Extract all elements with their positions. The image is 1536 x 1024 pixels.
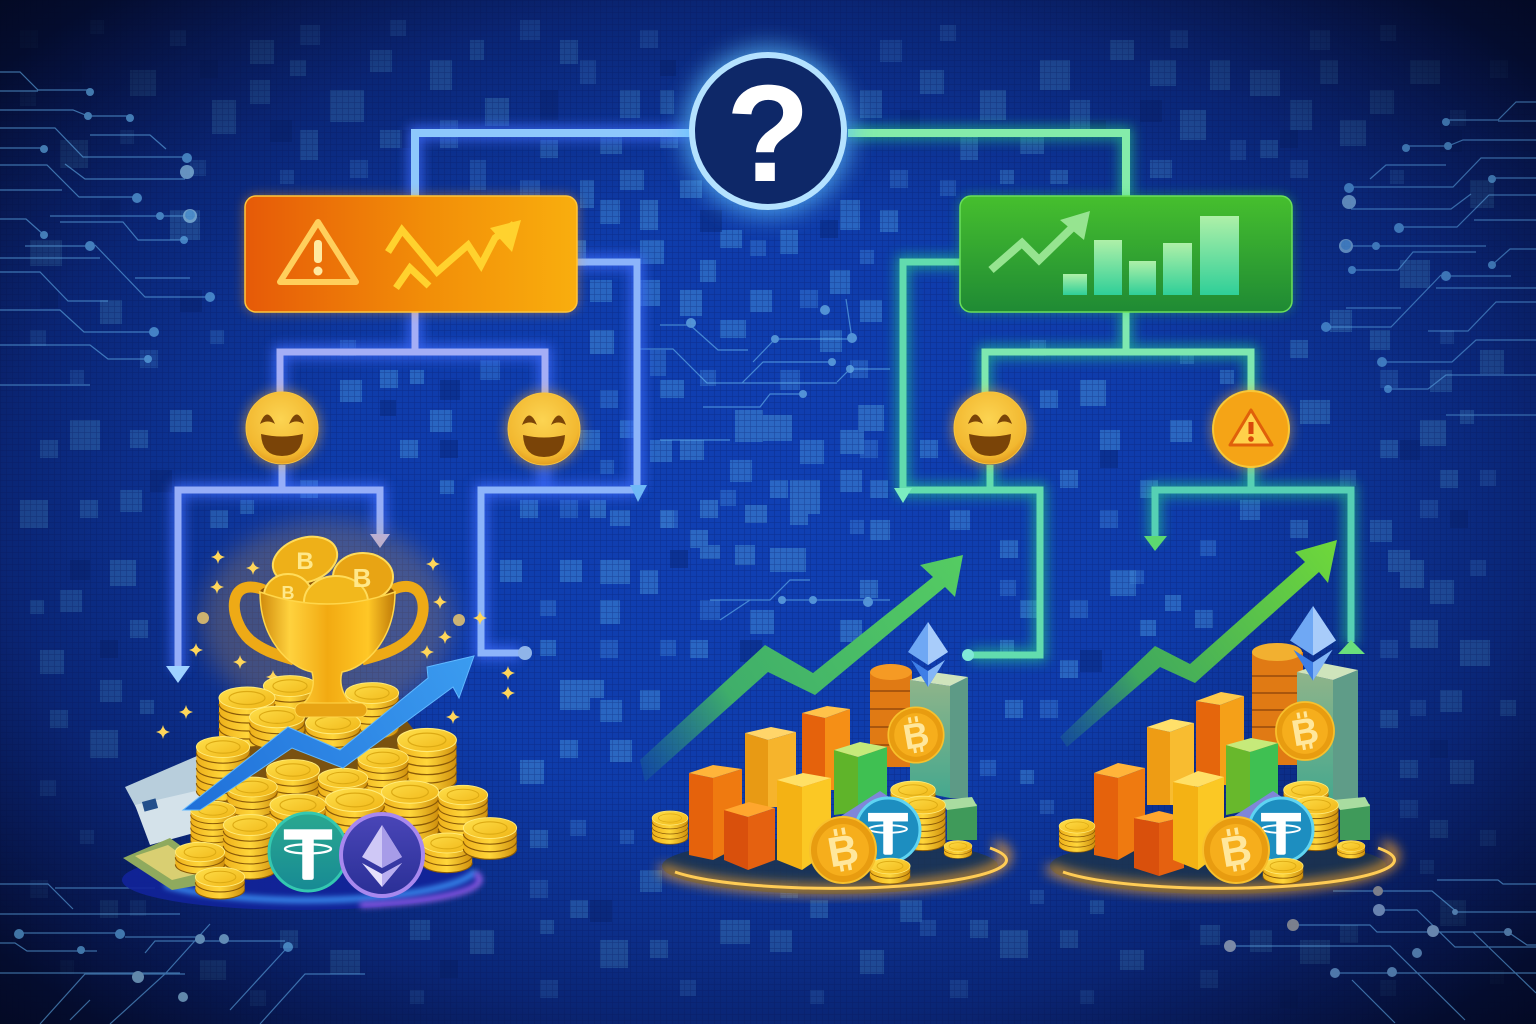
connector: green box to outcomes bbox=[985, 311, 1251, 395]
icon: warning coin bbox=[1211, 389, 1291, 469]
icon: warning triangle bbox=[280, 222, 356, 282]
coin pile backing bbox=[215, 695, 470, 872]
connector: warning branch bbox=[1155, 465, 1351, 642]
connector: left smiley branch bbox=[178, 465, 380, 672]
sparkles bbox=[156, 550, 515, 739]
circuit lines: left bbox=[0, 72, 215, 385]
connector: question to orange box bbox=[415, 133, 690, 197]
trophy: B bbox=[296, 548, 314, 575]
small coin stack bbox=[1059, 819, 1095, 852]
outcome: trophy and coin pile bbox=[122, 520, 517, 910]
outcome: green arrow with bar stack bbox=[640, 555, 1007, 894]
blue growth arrow bbox=[183, 656, 474, 810]
icon: smiley centre bbox=[506, 391, 582, 467]
coin: upper bitcoin bbox=[1276, 702, 1334, 760]
question mark node: ? bbox=[726, 57, 810, 211]
outcome: second green arrow with bar stack bbox=[1048, 540, 1395, 894]
bar chart bbox=[689, 664, 968, 870]
connector glow: right bbox=[848, 133, 1350, 655]
small coin stack bbox=[652, 811, 688, 844]
connector: orange box to right column bbox=[481, 262, 637, 653]
icon: ethereum gem bbox=[1290, 606, 1336, 681]
base glow ellipse bbox=[122, 850, 480, 910]
circuit lines: centre bbox=[640, 299, 890, 620]
connector: green box to column bbox=[903, 262, 1040, 655]
connector end dot bbox=[962, 649, 974, 661]
icon: smiley left bbox=[244, 390, 320, 466]
coin cluster bbox=[1203, 781, 1370, 884]
panel: green growth box bbox=[960, 196, 1292, 312]
trophy: B bbox=[353, 563, 371, 593]
icon: growth arrow bbox=[991, 211, 1090, 270]
connector: orange box to outcomes bbox=[280, 311, 545, 395]
arrow head: warning right bbox=[1338, 640, 1365, 654]
green arrow bbox=[640, 555, 963, 782]
green arrow bbox=[1060, 540, 1337, 747]
coin: tether bbox=[269, 813, 347, 891]
circuit lines: bottom right bbox=[1224, 880, 1536, 1023]
ground ring bbox=[1048, 838, 1395, 894]
connector: question to green box bbox=[848, 133, 1126, 197]
bar chart bbox=[1094, 643, 1358, 876]
banknotes bbox=[123, 756, 228, 890]
arrow head: far left bbox=[166, 666, 190, 683]
connector glow: left bbox=[178, 133, 690, 670]
panel: orange warning box bbox=[245, 196, 577, 312]
arrow head: warning left bbox=[1144, 536, 1167, 551]
question mark node bbox=[684, 47, 852, 215]
trophy bbox=[234, 529, 423, 717]
connector: smiley drop bbox=[986, 465, 994, 490]
circuit lines: right bbox=[1321, 102, 1536, 415]
trophy glow bbox=[202, 520, 452, 720]
connector network: left branch bbox=[166, 133, 690, 683]
arrow head: near trophy bbox=[370, 534, 390, 548]
icon: smiley right bbox=[952, 390, 1028, 466]
icon: ethereum gem bbox=[908, 622, 948, 687]
circuit lines: bottom left bbox=[0, 884, 365, 1024]
trophy: B bbox=[282, 583, 294, 603]
coin stacks bbox=[175, 676, 517, 899]
arrow head: column bbox=[894, 488, 912, 503]
ground ring bbox=[660, 838, 1007, 894]
connector network: right branch bbox=[848, 133, 1365, 661]
coin: upper bitcoin bbox=[888, 707, 944, 763]
icon: volatile arrow bbox=[388, 220, 521, 288]
coin: ethereum bbox=[341, 814, 423, 896]
coin cluster bbox=[810, 781, 977, 884]
connector end dot bbox=[518, 646, 532, 660]
icon: bar chart bbox=[1063, 216, 1239, 295]
arrow head: column join bbox=[630, 485, 647, 502]
